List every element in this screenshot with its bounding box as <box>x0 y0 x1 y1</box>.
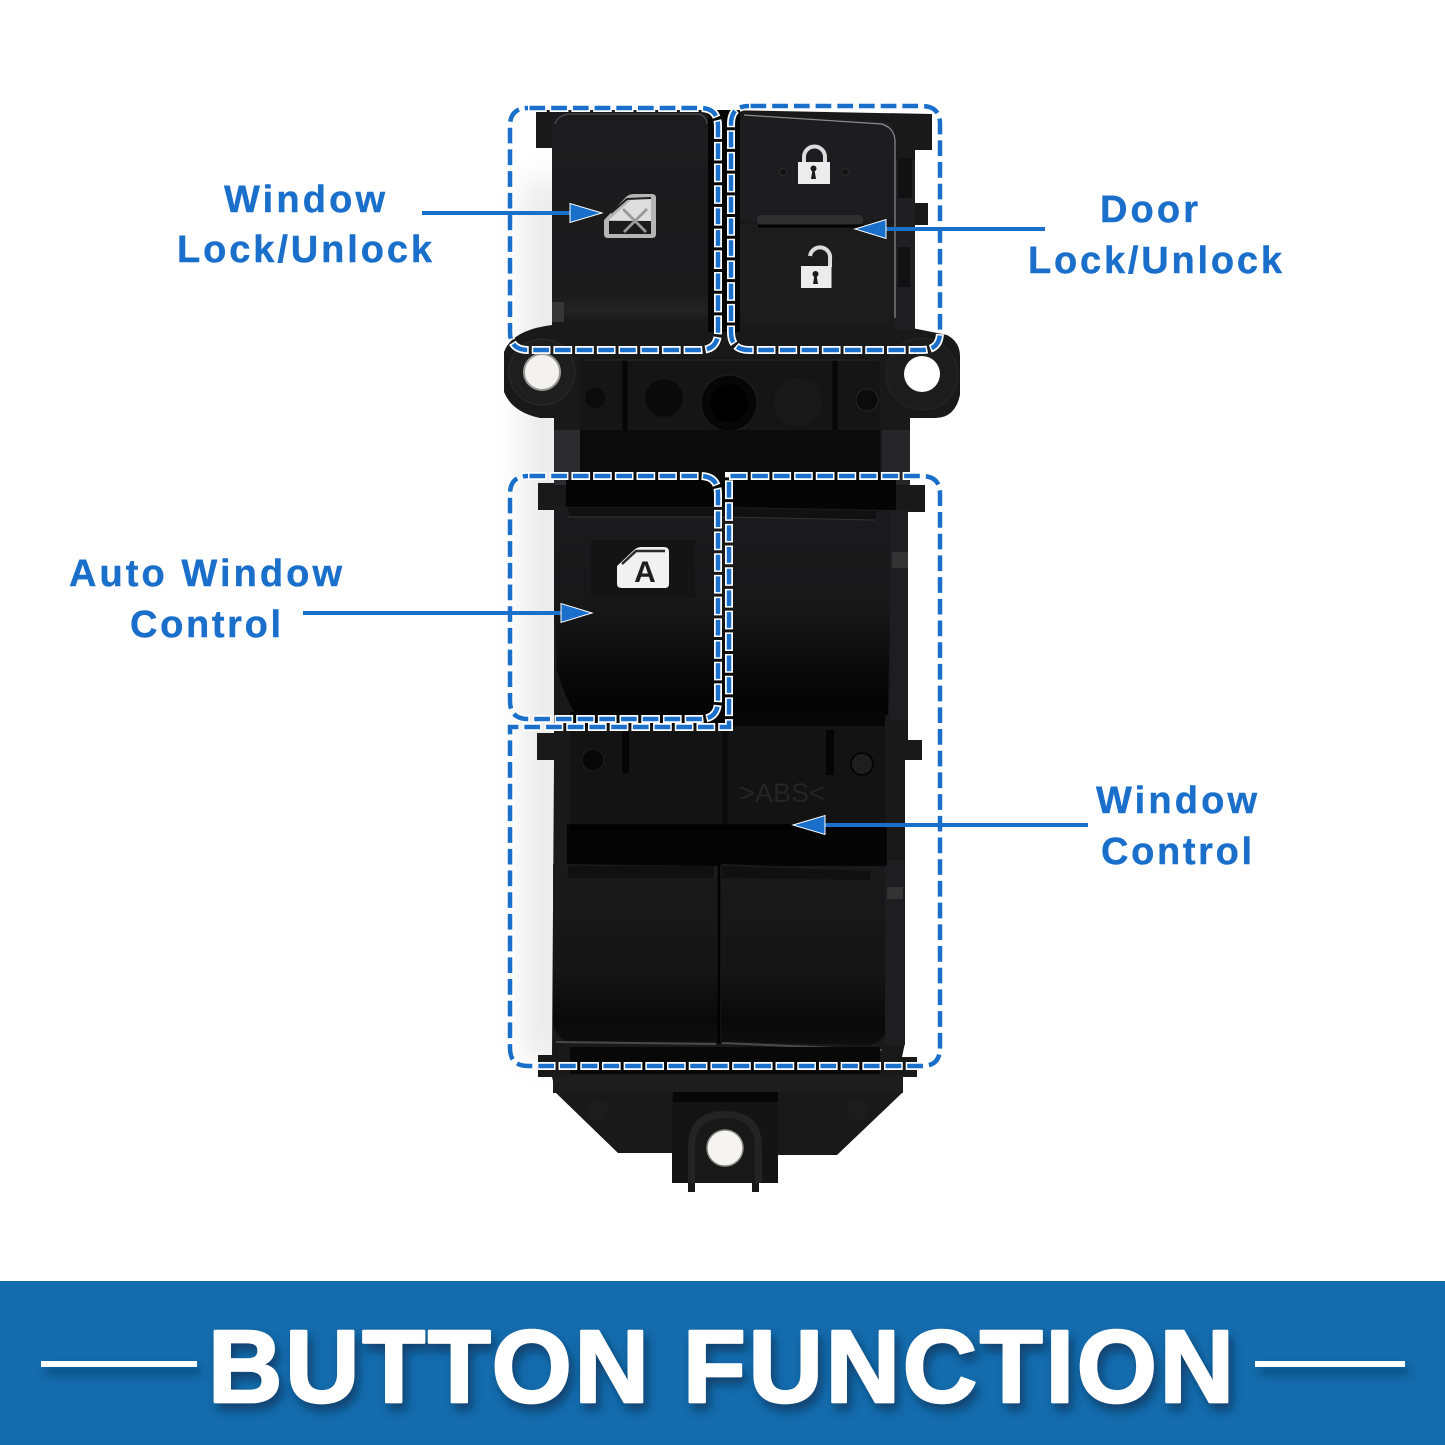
lower ledge <box>553 1047 903 1121</box>
button: window lock <box>552 113 708 325</box>
label: auto window control: Auto Window <box>69 553 342 595</box>
label: window control: Window <box>1096 780 1257 822</box>
bottom mounting tab <box>672 1092 778 1183</box>
label: window lock/unlock: Window <box>224 179 385 221</box>
dashed outline: door lock area <box>731 106 940 350</box>
icon: window lock <box>604 194 656 238</box>
icon plate: auto window <box>591 540 695 598</box>
banner heading with rules: BUTTON FUNCTION <box>208 1309 1234 1424</box>
label: door lock/unlock: Lock/Unlock <box>1028 240 1283 282</box>
centre bridge with sockets <box>580 358 880 432</box>
window switch product photo <box>504 110 960 1192</box>
button: door lock <box>740 115 895 323</box>
neck section <box>554 430 910 510</box>
product drop shadow <box>525 180 565 1060</box>
icon: open padlock <box>801 247 832 288</box>
icon: closed padlock <box>780 146 848 184</box>
dashed outline: auto window area <box>510 476 718 719</box>
label: window lock/unlock: Lock/Unlock <box>177 229 433 271</box>
label: window control <box>1096 780 1257 873</box>
arrow: window lock <box>422 204 602 222</box>
label: door lock/unlock: Door <box>1100 189 1198 231</box>
button: window control upper right <box>728 507 890 715</box>
label: auto window control <box>69 553 342 646</box>
label: window lock/unlock <box>177 179 433 271</box>
arrow: door lock <box>855 220 1045 238</box>
label: auto window control: Control <box>130 604 281 646</box>
buttons: window control lower <box>553 864 885 1050</box>
switch body silhouette <box>504 110 960 1192</box>
slot and dark band <box>567 824 887 866</box>
dashed outline: window control area <box>510 476 940 1066</box>
right mounting ear <box>886 338 958 410</box>
label: window control: Control <box>1101 831 1252 873</box>
dashed outline: window lock area <box>510 108 718 350</box>
banner <box>0 1281 1445 1445</box>
moulded text: >ABS< <box>739 778 825 808</box>
arrow: window control <box>793 816 1088 834</box>
left mounting ear <box>509 339 575 405</box>
icon plate: auto window: A <box>634 556 656 589</box>
button: auto window <box>555 507 728 714</box>
right-side rail detail <box>885 158 915 1045</box>
centre channel <box>708 110 740 332</box>
arrow: auto window <box>303 604 592 622</box>
label: door lock/unlock <box>1028 189 1283 282</box>
housing middle section with circles <box>570 712 885 827</box>
